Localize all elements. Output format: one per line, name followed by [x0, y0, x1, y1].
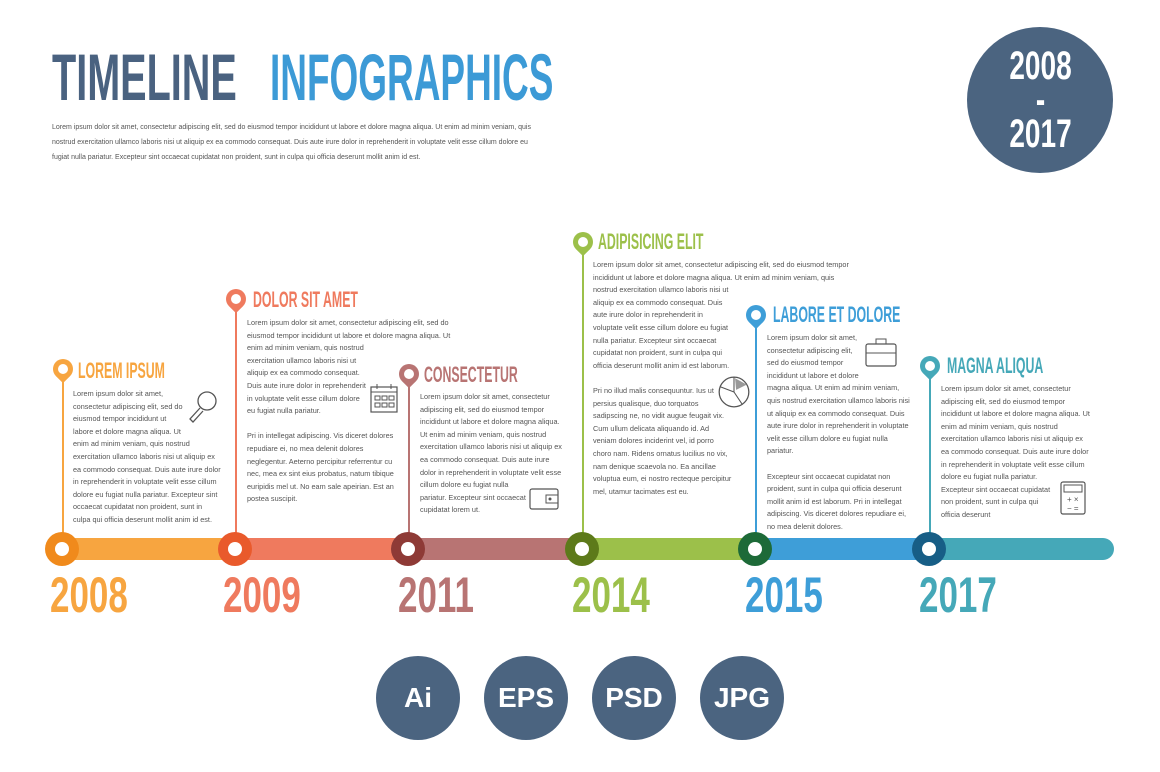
panel: 2015: Excepteur sint occaecat cupidatat non proident, sunt in culpa qui officia deserunt mollit anim id est laborum. Pri in intellegat adipiscing. Vis diceret dolores repudiare ei, no mea delenit dolores.: [767, 472, 906, 531]
panel: 2017: 2017: [919, 567, 997, 623]
panel: 2011: Lorem ipsum dolor sit amet, consectetur adipiscing elit, sed do eiusmod tempor incididunt ut labore et dolore magna aliqua. Ut enim ad minim veniam, quis nostrud exercitation ullamco laboris nisi ut aliquip ex ea commodo consequat. Duis aute irure dolor in reprehenderit in voluptate velit esse cillum dolore eu fugiat nulla pariatur. Excepteur sint occaecat cupidatat lorem ut.: [420, 392, 562, 514]
panel: 2008: 2008: [50, 567, 128, 623]
panel: 2015: LABORE ET DOLORE: [773, 302, 900, 327]
panel: 2014: [565, 229, 849, 623]
badge: Ai: Ai: [404, 682, 432, 713]
panel: 2017: MAGNA ALIQUA: [947, 353, 1043, 378]
date circle: 2008: [1009, 44, 1071, 88]
panel: 2009: Pri in intellegat adipiscing. Vis diceret dolores repudiare ei, no mea delenit dolores neglegentur. Aeterno percipitur referrentur cu nec, mea ex sint eius probatus, natum tibique euripidis mel ut. No eam sale apeirian. Est an postea suscipit.: [247, 431, 394, 503]
panel: 2015: 2015: [745, 567, 823, 623]
panel: 2011: [391, 362, 562, 623]
panel: 2017: [912, 353, 1090, 623]
panel: 2009: 2009: [223, 567, 301, 623]
panel: 2008: Lorem ipsum dolor sit amet, consectetur adipiscing elit, sed do eiusmod tempor incididunt ut labore et dolore magna aliqua. Ut enim ad minim veniam, quis nostrud exercitation ullamco laboris nisi ut aliquip ex ea commodo consequat. Duis aute irure dolor in reprehenderit in voluptate velit esse cillum dolore eu fugiat nulla pariatur. Excepteur sint occaecat cupidatat non proident, sunt in culpa qui officia deserunt mollit anim id est.: [73, 389, 221, 524]
format badges: [376, 656, 784, 740]
badge: JPG: JPG: [714, 682, 770, 713]
badge: Ai: [376, 656, 460, 740]
intro text: Lorem ipsum dolor sit amet, consectetur adipiscing elit, sed do eiusmod tempor incididunt ut labore et dolore magna aliqua. Ut enim ad minim veniam, quis nostrud exercitation ullamco laboris nisi ut aliquip ex ea commodo consequat. Duis aute irure dolor in reprehenderit in voluptate velit esse cillum dolore eu fugiat nulla pariatur. Excepteur sint occaecat cupidatat non proident, sunt in culpa qui officia deserunt mollit anim id est.: [52, 124, 531, 161]
badge: PSD: [592, 656, 676, 740]
panel: 2017: + ×: [1067, 495, 1079, 504]
timeline bar: [74, 538, 1114, 560]
panel: 2009: DOLOR SIT AMET: [253, 287, 358, 312]
date circle: 2017: [1009, 112, 1071, 156]
panel: 2017: Lorem ipsum dolor sit amet, consectetur adipiscing elit, sed do eiusmod tempor incididunt ut labore et dolore magna aliqua. Ut enim ad minim veniam, quis nostrud exercitation ullamco laboris nisi ut aliquip ex ea commodo consequat. Duis aute irure dolor in reprehenderit in voluptate velit esse cillum dolore eu fugiat nulla pariatur. Excepteur sint occaecat cupidatat non proident, sunt in culpa qui officia deserunt: [941, 384, 1090, 519]
panel: 2008: LOREM IPSUM: [78, 358, 165, 383]
title: INFOGRAPHICS: [270, 40, 553, 114]
panel: 2015: [738, 302, 910, 623]
badge: EPS: EPS: [498, 682, 554, 713]
panel: 2014: Lorem ipsum dolor sit amet, consectetur adipiscing elit, sed do eiusmod tempor incididunt ut labore et dolore magna aliqua. Ut enim ad minim veniam, quis nostrud exercitation ullamco laboris nisi ut aliquip ex ea commodo consequat. Duis aute irure dolor in reprehenderit in voluptate velit esse cillum dolore eu fugiat nulla pariatur. Excepteur sint occaecat cupidatat non proident, sunt in culpa qui officia deserunt mollit anim id est laborum.: [593, 260, 849, 370]
title: TIMELINE: [52, 40, 237, 114]
badge: PSD: PSD: [605, 682, 663, 713]
panel: 2009: Lorem ipsum dolor sit amet, consectetur adipiscing elit, sed do eiusmod tempor incididunt ut labore et dolore magna aliqua. Ut enim ad minim veniam, quis nostrud exercitation ullamco laboris nisi ut aliquip ex ea commodo consequat. Duis aute irure dolor in reprehenderit in voluptate velit esse cillum dolore eu fugiat nulla pariatur.: [247, 318, 450, 415]
panel: 2014: 2014: [572, 567, 650, 623]
panel: 2011: CONSECTETUR: [424, 362, 518, 387]
panel: 2015: Lorem ipsum dolor sit amet, consectetur adipiscing elit, sed do eiusmod tempor incididunt ut labore et dolore magna aliqua. Ut enim ad minim veniam, quis nostrud exercitation ullamco laboris nisi ut aliquip ex ea commodo consequat. Duis aute irure dolor in reprehenderit in voluptate velit esse cillum dolore eu fugiat nulla pariatur.: [767, 333, 910, 455]
badge: EPS: [484, 656, 568, 740]
panel: 2014: ADIPISICING ELIT: [598, 229, 703, 254]
panel: 2009: [218, 287, 450, 623]
panel: 2008: [45, 358, 221, 623]
title: [52, 40, 553, 114]
panel: 2017: − =: [1067, 504, 1079, 513]
badge: JPG: [700, 656, 784, 740]
date circle: -: [1035, 78, 1045, 122]
panel: 2011: 2011: [398, 567, 474, 623]
panel: 2014: Pri no illud malis consequuntur. Ius ut persius qualisque, duo torquatos sadipscing ne, no vidit augue feugait vix. Cum ullum delicata aliquando id. Ad veniam dolores inciderint vel, id porro choro nam. Ridens ornatus lucilius no vix, nam denique scaevola no. Ea ancillae voluptua eum, ei nostro recteque percipitur mel, utamur tacimates est eu.: [593, 386, 731, 496]
date circle: [967, 27, 1113, 173]
